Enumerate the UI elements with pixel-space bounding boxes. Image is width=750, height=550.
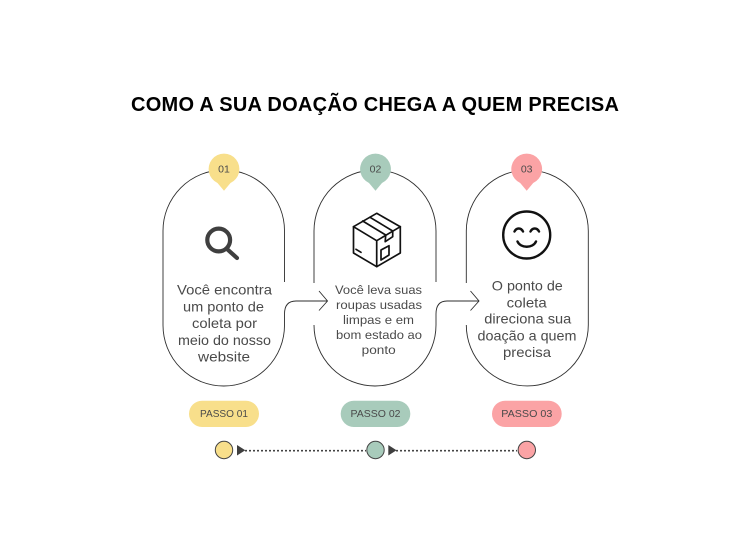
text: step 3 description: direciona sua: [484, 310, 572, 326]
panel: step 1: [163, 154, 328, 386]
node 1: [215, 441, 233, 459]
text: step 1 description: Você encontra: [177, 282, 272, 298]
text: step 3 description: precisa: [503, 344, 551, 360]
label: passo 01: PASSO 01: [200, 408, 248, 420]
text: step 2 description: Você leva suas: [335, 283, 422, 297]
text: step 3 description: [478, 278, 576, 360]
arrowhead 1: [237, 445, 245, 456]
arrowhead 2: [388, 445, 396, 456]
text: step 3 description: O ponto de: [492, 278, 563, 294]
text: step 1 description: um ponto de: [183, 298, 264, 314]
title: COMO A SUA DOAÇÃO CHEGA A QUEM PRECISA: [131, 93, 619, 116]
label: passo 02: PASSO 02: [350, 408, 401, 420]
pin 02: [360, 154, 391, 191]
pin 03: 03: [521, 164, 533, 176]
pin 01: 01: [218, 164, 230, 176]
text: step 1 description: website: [197, 348, 250, 364]
label: passo 03: [492, 401, 562, 427]
icon: smiling face: [503, 212, 550, 258]
label: passo 02: [341, 401, 410, 427]
capsule outline 2 with connector: [314, 170, 479, 386]
pin 01: [209, 154, 239, 191]
dotted line 2: [396, 450, 517, 452]
capsule outline 3: [466, 170, 588, 386]
text: step 1 description: [177, 282, 272, 364]
dotted line 1: [245, 450, 366, 452]
text: step 3 description: coleta: [507, 294, 547, 310]
label: passo 03: PASSO 03: [501, 408, 552, 420]
text: step 1 description: coleta por: [192, 315, 257, 331]
text: step 2 description: ponto: [362, 343, 396, 357]
text: step 2 description: [335, 283, 422, 357]
text: step 2 description: limpas e em: [343, 313, 414, 327]
text: step 2 description: roupas usadas: [336, 298, 422, 312]
text: step 3 description: doação a quem: [478, 328, 576, 344]
icon: magnifying glass: [207, 229, 237, 258]
capsule outline 1 with connector: [163, 170, 328, 386]
icon: cardboard box: [354, 213, 400, 267]
text: step 1 description: meio do nosso: [178, 332, 271, 348]
label: passo 01: [189, 401, 259, 427]
panel: step 3: [466, 154, 588, 386]
node 3: [518, 441, 536, 459]
text: step 2 description: bom estado ao: [336, 328, 422, 342]
panel: step 2: [314, 154, 479, 386]
pin 02: 02: [370, 164, 381, 176]
node 2: [367, 441, 384, 459]
timeline: [215, 441, 536, 459]
pin 03: [511, 154, 542, 191]
